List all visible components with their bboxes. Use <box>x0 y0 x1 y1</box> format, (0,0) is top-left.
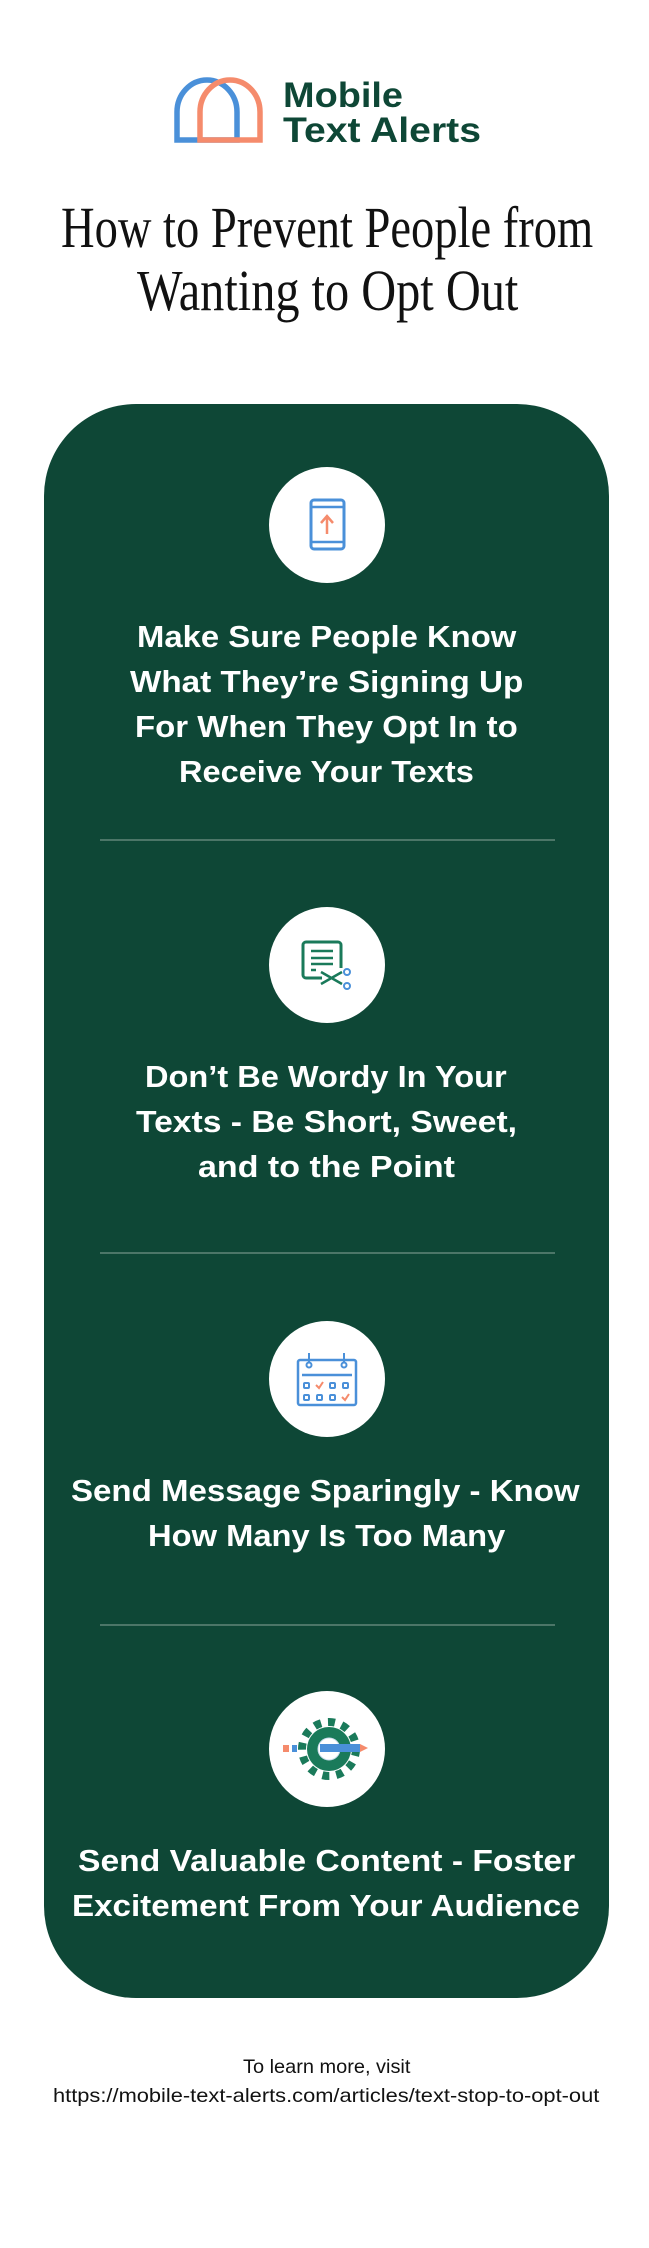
icon: calendar <box>269 1321 385 1437</box>
tip 4 text <box>72 1844 580 1923</box>
tip 1 text: For When They Opt In to <box>135 710 518 744</box>
tip 2 text <box>136 1060 517 1184</box>
logo <box>177 76 481 150</box>
tip 3 text: Send Message Sparingly - Know <box>71 1474 580 1508</box>
tip 2 <box>136 907 517 1184</box>
tip 1 <box>130 467 523 789</box>
logo: Text Alerts <box>283 111 481 150</box>
tip 3 text: How Many Is Too Many <box>148 1519 506 1553</box>
tip 3 <box>71 1321 580 1553</box>
footer <box>53 2056 599 2106</box>
panel: tips <box>44 404 609 1998</box>
footer: https://mobile-text-alerts.com/articles/text-stop-to-opt-out <box>53 2085 599 2106</box>
tip 4 text: Send Valuable Content - Foster <box>78 1844 575 1878</box>
title <box>61 197 593 323</box>
icon: gear pencil <box>269 1691 385 1807</box>
tip 4 <box>72 1691 580 1923</box>
footer: To learn more, visit <box>243 2056 410 2077</box>
tip 1 text: What They’re Signing Up <box>130 665 523 699</box>
title: Wanting to Opt Out <box>137 260 519 323</box>
icon: document scissors <box>269 907 385 1023</box>
tip 1 text: Make Sure People Know <box>137 620 517 654</box>
icon: phone upload <box>269 467 385 583</box>
tip 2 text: Don’t Be Wordy In Your <box>145 1060 507 1094</box>
icon: logo arches <box>177 80 260 140</box>
logo wordmark: Mobile <box>283 76 403 115</box>
tip 2 text: Texts - Be Short, Sweet, <box>136 1105 517 1139</box>
title: How to Prevent People from <box>61 197 593 260</box>
tip 3 text <box>71 1474 580 1553</box>
tip 4 text: Excitement From Your Audience <box>72 1889 580 1923</box>
tip 1 text <box>130 620 523 789</box>
tip 2 text: and to the Point <box>198 1150 455 1184</box>
tip 1 text: Receive Your Texts <box>179 755 474 789</box>
